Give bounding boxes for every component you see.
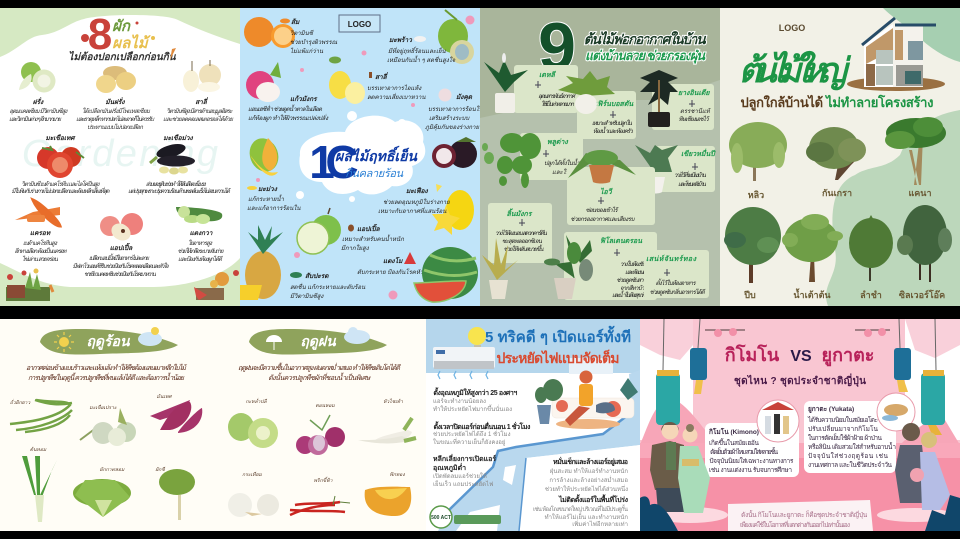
logo box: LOGO — [348, 20, 371, 29]
text: watermelon: แตงโม — [383, 256, 403, 265]
icon: lantern left small — [690, 319, 707, 394]
text: watermelon — [357, 252, 430, 276]
labels row 2: วิตามินซี เบต้าแคโรทีน และไลโคปีนสูง — [21, 180, 100, 188]
tree: kanthara — [806, 127, 866, 180]
stage floor — [640, 458, 960, 531]
text: tip 3: เปิดพัดลมแอร์ช่วยให้ — [433, 472, 487, 480]
callout: summary — [728, 500, 873, 531]
card: snake plant: ลิ้นมังกร — [506, 208, 533, 218]
labels row 2: มีใบพิษกับร่างกายไม่ปอกเปลือกและต้องหลีกเลี่ยงที่สุด — [12, 186, 111, 195]
labels row 1: และวิตามินต่าง ๆ อีกมากมาย — [9, 115, 61, 123]
card: fern: ห้องน้ำและห้องครัว — [593, 126, 633, 135]
text: dragon fruit — [248, 95, 329, 122]
icon: guava — [19, 62, 56, 92]
panel: air conditioner tips — [426, 319, 640, 531]
labels row 1: มันฝรั่ง — [105, 97, 125, 106]
icon: orange — [244, 17, 295, 48]
card: kimono: เกิดขึ้นในสมัยเฮอัน — [709, 438, 760, 447]
text: starfruit: เหมาะกับอากาศที่แสนร้อน — [378, 206, 447, 215]
icon: watering can right — [194, 270, 239, 300]
title — [538, 9, 707, 85]
text: tip 4: หมั่นเช็กและล้างแอร์อยู่เสมอ — [553, 456, 628, 467]
text: mangosteen note — [425, 88, 484, 131]
illustration: yukata couple — [877, 423, 953, 522]
text: tip 2: ในขณะที่ความเย็นก็ยังคงอยู่ — [433, 437, 505, 446]
icon: rubber plant — [640, 70, 678, 127]
text: tip 5: ทำให้แอร์ไม่เย็น และทำงานหนัก — [545, 512, 628, 521]
card: philodendron: และน้ำในห้องสุขาภิบาล — [612, 290, 652, 299]
icon: kimono circle — [757, 400, 799, 442]
text: dragon fruit: แอนเฮชีฟ่ำ ช่วยดูดน้ำตาลในเลือด — [248, 104, 323, 113]
card: ivy — [567, 167, 655, 225]
title: กิโมโน — [725, 344, 780, 365]
text: coconut — [387, 36, 456, 64]
text: rainy intro — [238, 362, 401, 382]
icon: tomato — [37, 146, 84, 178]
callout: summary: เพียงแค่ใช้ในโอกาสที่แตกต่างกันออกไปเท่านั้นเอง — [740, 520, 850, 529]
cloud title: ผลไม้ฤทธิ์เย็น — [335, 145, 418, 164]
card: yukata: ในการตัดเย็บใช้ผ้าฝ้าย ผ้าป่าน — [808, 433, 883, 442]
panel: big trees — [720, 8, 960, 306]
card: peace lily: เดหลี — [539, 70, 557, 79]
labels row 3: อีกทางเลือก ต้องเป็นแครอท — [14, 247, 68, 255]
title: 5 ทริคดี ๆ เปิดแอร์ทั้งที — [485, 325, 631, 346]
text: summer intro: การปลูกพืชในฤดูนี้ ควรปลูกพืชที่ทนแล้งได้ดี และต้องการน้ำน้อย — [28, 372, 185, 382]
card: snake plant — [488, 203, 552, 263]
icon: chili: พริกขี้ฟ้า — [314, 476, 333, 484]
text: tip 2 — [433, 420, 531, 446]
text: tip 5: เพิ่มค่าไฟอีกหลายเท่า — [572, 520, 628, 528]
panel: 10 summer fruits — [240, 8, 484, 306]
title: ประหยัดไฟแบบจัดเต็ม — [496, 349, 620, 366]
text: mangosteen note: บรรเทาอาการร้อนใน — [428, 105, 484, 113]
labels row 1 — [9, 97, 233, 131]
labels row 3: มีฟลาโวนอยด์ซิริน ช่วยป้องกันโรคหลอดเลือดและหัวใจ — [73, 262, 169, 270]
card: peace lily: อุดมสารพันธ์อากาศ — [538, 92, 576, 100]
card: kimono: กิโมโน (Kimono) — [709, 427, 759, 436]
text: pineapple: สดชื่น แก้กระหายและดับร้อน — [290, 282, 366, 291]
card: kimono: เช่น งานแต่งงาน รับจบการศึกษา — [709, 466, 792, 474]
labels row 3: ไข่เล่าน สวยจร่อน — [22, 255, 59, 263]
labels row 1: สาลี่ — [195, 97, 209, 106]
labels row 3: เบต้าแคโรทีนสูง — [23, 239, 58, 247]
card: philodendron: จากสีทาบ้าน — [620, 284, 649, 292]
text: pineapple: มีวิตามินซีสูง — [290, 292, 324, 300]
card: golden pothos: ช่วยดูดซับกลิ่นอาหารได้ดี — [650, 287, 706, 296]
tree: lamcha — [849, 215, 893, 281]
card: rubber plant — [652, 84, 714, 130]
text: orange: ส้ม — [291, 18, 300, 26]
panel: kimono vs yukata — [640, 319, 960, 531]
text: pear — [367, 72, 426, 101]
icon: long bean: ถั่วฝักยาว — [10, 398, 31, 406]
title: ยูกาตะ — [822, 345, 874, 367]
text: starfruit: มะเฟือง — [406, 187, 429, 195]
labels row 2: มะเขือม่วง — [163, 134, 194, 142]
labels row 3: แตงกวา — [190, 230, 213, 237]
text: summer intro: อากาศค่อนข้างแบบร้าวและแห้งแล้ง ทำให้พืชต้องแลนเมาหลีกใบไม้ — [26, 363, 188, 372]
text: tip 4 — [545, 456, 628, 493]
icon: cabbage — [228, 397, 278, 448]
logo: 500 act — [430, 506, 501, 528]
logo: 500 act: 500 ACT — [431, 515, 451, 521]
card: yukata: ได้รับความนิยมในสมัยเอโดะ — [807, 416, 878, 424]
text: pineapple — [290, 272, 366, 300]
text: tip 1: แอร์จะทำงานน้อยลง — [433, 397, 486, 405]
text: tip 1: ทำให้ประหยัดไฟมากขึ้นนั่นเอง — [433, 403, 512, 413]
card: rubber plant: ดรรชานีแท้ — [680, 107, 712, 115]
icon: coriander: ผักชี — [155, 466, 166, 473]
card: yukata: ปัจจุบันใส่ช่วงฤดูร้อน เช่น — [808, 452, 889, 460]
title — [725, 344, 874, 387]
text: tip 4: ฝุ่นสะสม ทำให้แอร์ทำงานหนัก — [550, 467, 628, 475]
card: peace lily — [514, 65, 578, 113]
icon: watermelon — [414, 247, 478, 302]
labels row 1: และช่วยลดคอเลสเตอรอลได้ด้วย — [163, 115, 233, 123]
text: tip 3: หลีกเลี่ยงการเปิดแอร์ — [433, 453, 496, 463]
banner: summer — [40, 327, 178, 355]
icon: lettuce — [73, 467, 131, 517]
card: chinese evergreen: และโซนหลังบ้าน — [678, 180, 707, 188]
icon: scallion: ต้นหอม — [30, 446, 47, 453]
label: khae na: แคนา — [908, 188, 932, 198]
icon: white radish — [358, 398, 416, 443]
labels row 1: อุดมแคลเซียม มีวิตามินซีสูง — [9, 107, 68, 115]
icon: carrot — [15, 200, 60, 226]
labels row 3: แอปเปิ้ล — [110, 242, 133, 252]
title: ผลไม้ — [112, 34, 152, 52]
logo box — [339, 15, 380, 32]
card: golden pothos: ตั้งไว้ในห้องอาหาร — [656, 278, 696, 287]
card: chinese evergreen — [655, 146, 716, 192]
text: pear: บรรเทาอาการไอแห้ง — [367, 84, 422, 92]
card: fern: เหมาะสำหรับปลูกใน — [592, 119, 633, 127]
text: orange: ช่วยบำรุงผิวพรรณ — [290, 39, 338, 46]
logo: LOGO — [779, 23, 805, 33]
label: lamcha: ลำชำ — [860, 290, 882, 300]
icon: mango — [245, 134, 283, 176]
icon: eggplant — [150, 141, 195, 174]
card: philodendron — [564, 232, 657, 300]
text: pineapple: สับปะรด — [305, 272, 329, 280]
labels row 1: ฝรั่ง — [33, 97, 44, 106]
banner: rainy: ฤดูฝน — [300, 333, 337, 350]
text: orange: ไม่แพ้แก่ว่าน — [290, 47, 324, 55]
labels row 3: และป้องกันท้องผูกได้ดี — [178, 255, 223, 263]
text: starfruit: ช่วยลดอุณหภูมิในร่างกาย — [383, 198, 450, 206]
text: rainy intro: ดังนั้นควรปลูกพืชผักที่ชอบน้ำเป็นพิเศษ — [268, 372, 371, 382]
text: apple: มีกากใยสูง — [341, 244, 370, 252]
icon: pineapple — [240, 225, 283, 300]
tree: khae na — [885, 117, 946, 185]
text: tip 4: ช่วยทำให้ประหยัดไฟได้ส่วนหนึ่ง — [545, 485, 628, 493]
icon: ivy pot — [568, 150, 636, 184]
cloud title — [296, 111, 425, 202]
icon: light bulb — [468, 327, 486, 351]
icon: starfruit — [432, 184, 474, 235]
card: snake plant: ช่วยให้หลับสบายขึ้น — [503, 244, 544, 253]
text: tip 4: การล้างและล้างอย่างสม่ำเสมอ — [549, 476, 628, 484]
callout: summary: ดังนั้น กิโมโนและยูกาตะ ก็คือชุดประจำชาติญี่ปุ่น — [741, 510, 868, 519]
icon: thai eggplant: มะเขือเปราะ — [89, 404, 117, 411]
decorative dots — [256, 16, 474, 300]
text: apple — [341, 223, 404, 252]
text: tip 5: เช่น ห้องโถงขนาดใหญ่ บริเวณที่ไม่มีประตูกั้น — [533, 503, 628, 513]
icon: green apple — [297, 208, 341, 254]
icon: lantern right large — [921, 319, 945, 435]
card: yukata: ปรับเปลี่ยนมาจากกิโมโน — [808, 424, 879, 433]
card: kimono: ปัจจุบันนิยมใส่เฉพาะงานทางการ — [709, 457, 794, 465]
card: pothos: พลูด่าง — [547, 138, 568, 146]
banner: summer: ฤดูร้อน — [86, 333, 131, 350]
card: rubber plant: ยางอินเดีย — [678, 88, 710, 97]
icon: peace lily plant — [484, 53, 528, 113]
card: yukata: ยูกาตะ (Yukata) — [808, 406, 854, 414]
text: orange — [290, 18, 338, 55]
title — [68, 10, 177, 63]
labels row 3 — [14, 230, 224, 278]
labels row 1: ประทานแบบไม่ปอกเปลือก — [87, 123, 143, 131]
icon: lantern right small — [894, 319, 911, 392]
card: snake plant: วางไว้ห้องนอน สดวกคาร์ดีน — [495, 229, 548, 237]
cloud title: C — [325, 136, 359, 188]
text: mangosteen note: เสริมสร้างระบบ — [429, 114, 470, 122]
text: orange: วิตามินซี — [290, 29, 314, 37]
cloud title: กินคลายร้อน — [345, 167, 404, 180]
icon: pear — [183, 60, 221, 92]
illustration: kimono couple — [650, 422, 728, 523]
icon: lettuce: ผักกาดหอม — [100, 467, 125, 473]
text: tip 1: ตั้งอุณหภูมิให้สูงกว่า 25 องศาฯ — [433, 386, 517, 398]
icon: pothos — [482, 133, 541, 188]
labels row 3: เปลือกแอปเปิ้ลมีใยอาหารไม่ละลาย — [89, 253, 149, 262]
text: tip 5 — [533, 493, 629, 528]
card: pothos — [520, 133, 583, 180]
icon: shallot — [296, 403, 345, 455]
icon: shallot: ตอนหอม — [315, 403, 335, 409]
label: calabash: น้ำเต้าต้น — [793, 288, 831, 300]
label: willow: หลิว — [748, 190, 764, 200]
card: kimono: ตัดเย็บด้วยผ้าไหม สวมใส่หลายชั้น — [710, 447, 779, 456]
icon: apple — [100, 213, 143, 244]
label: silver oak: ซิลเวอร์โอ๊ค — [899, 289, 945, 300]
text: apple: แอปเปิ้ล — [357, 223, 381, 233]
text: coconut: เหมือนกันน้ำ ๆ สดชื่นสูงใจ — [387, 55, 456, 64]
text: dragon fruit: แก้ท้องผูก ทำให้ผิวพรรณเปล่งปลั่ง — [248, 113, 329, 122]
text: apple: เหมาะสำหรับคนน้ำหนัก — [342, 234, 404, 243]
text: coconut: มะพร้าว — [389, 36, 413, 44]
card: golden pothos: เสน่ห์จันทร์ทอง — [646, 254, 697, 263]
title: ต้นไม้ฟอกอากาศในบ้าน — [584, 31, 707, 47]
tree: peep — [724, 207, 781, 283]
text: mango — [247, 185, 301, 212]
text: tip 3: อุณหภูมิต่ำ — [433, 462, 466, 473]
icon: garlic: กระเทียม — [242, 471, 263, 478]
icon: garlic — [228, 471, 279, 517]
icon: fern — [558, 71, 615, 114]
decoration: cherry branches — [705, 328, 890, 337]
text: starfruit — [378, 187, 450, 215]
icon: long bean — [10, 398, 72, 432]
icon: sweet potato — [150, 394, 202, 433]
icon: pumpkin: ฟักทอง — [389, 472, 405, 478]
text: tip 3 — [433, 453, 496, 488]
icon: chili — [290, 476, 350, 515]
panel: 9 air purifying plants — [480, 8, 720, 306]
card: golden pothos — [644, 250, 709, 298]
text: mangosteen note: ภูมิคุ้มกันของร่างกาย — [425, 123, 480, 131]
labels row 2 — [12, 134, 232, 195]
text: mango: และแก้อาการร้อนใน — [247, 204, 301, 212]
tree: silver oak — [897, 205, 952, 282]
text: coconut: มีที่อยู่ฤทธิ์ร้อนและเย็น — [388, 46, 447, 55]
cloud title: 1 — [309, 136, 335, 188]
text: rainy intro: ฤดูฝนจะมีความชื้นในอากาศสูง ฝนตกสม่ำเสมอ ทำให้พืชเติบโตได้ดี — [238, 362, 401, 372]
text: pear: สาลี่ — [375, 72, 389, 81]
card: philodendron: ช่วยดูดซับสารพิษ — [616, 277, 653, 284]
icon: coriander — [155, 466, 195, 520]
icon: snake plant — [482, 238, 518, 299]
card: fern — [577, 91, 636, 139]
card: chinese evergreen: เขียวหมื่นปี — [681, 148, 716, 158]
labels row 3: ชาเขียว แคตเทชิน ช่วยป้องกันโรคเบาหวาน — [84, 270, 157, 278]
icon: air conditioner — [433, 347, 495, 379]
icon: cabbage: กะหล่ำปลี — [245, 397, 268, 405]
icon: mangosteen — [432, 137, 477, 168]
labels row 2: ส่วนของรูติน ช่วยทำให้เส้นเลือดแข็งแรง — [146, 180, 207, 188]
labels row 2: มะเขือเทศ — [46, 134, 76, 142]
text: mango: มะม่วง — [258, 185, 278, 193]
card: snake plant: ซะสุดพลออกซิเจน — [502, 238, 543, 245]
text: summer intro — [26, 363, 188, 382]
card: ivy: ช่วยกรองอากาศและเสียงรบ — [570, 215, 636, 223]
icon: pear — [329, 56, 365, 104]
label: peep: ปีบ — [743, 290, 756, 300]
card: ivy: ซ่อนของเข้าไร้ — [586, 206, 620, 214]
panel: 8 vegetables and fruits — [0, 8, 240, 306]
icon: sweet potato: มันเทศ — [157, 394, 172, 400]
icon: dragon fruit — [246, 62, 281, 102]
card: philodendron: วางในห้องรับแขก — [620, 260, 654, 268]
text: tip 5: ไม่ติดตั้งแอร์ในพื้นที่โปร่ง — [558, 493, 629, 504]
text: mangosteen note: มังคุด — [456, 93, 473, 101]
icon: white radish: หัวไชเท้า — [383, 398, 403, 405]
text: pear: ลดความเสี่ยงเบาหวาน — [367, 92, 426, 101]
title: VS — [790, 348, 812, 365]
title: ไม่ต้องปอกเปลือกก่อนกิน — [68, 50, 177, 63]
card: philodendron: ฟิโลเดนดรอน — [600, 236, 643, 245]
card: chinese evergreen: วางไว้ที่ระเบียงบ้าน — [674, 170, 707, 179]
labels row 1: ใต้เปลือกมันฝรั่งมีโพแทสเซียม — [82, 106, 151, 115]
labels row 2: แต่ปรุงสุกเพราะปรุงความร้อน ต้านเซลล์มะเร็งไม่สงบหวานได้ — [128, 187, 232, 195]
labels row 1: วิตามินซีสูง มีสารต้านอนุมูลอิสระ — [166, 107, 233, 115]
label: kanthara: กันเกรา — [822, 188, 852, 198]
card: yukata — [804, 401, 896, 473]
icon: lantern left large — [656, 319, 680, 432]
text: mango: แก้กระหายน้ำ — [248, 194, 285, 203]
title: ผัก — [112, 18, 131, 35]
icon: yukata circle — [877, 393, 915, 431]
icon: coconut — [438, 10, 474, 64]
card: pothos: ปลูกได้ทั้งในน้ำ — [544, 158, 581, 167]
labels row 3: ช่วยให้เกลือระบายจับถ่าย — [178, 247, 224, 255]
card: philodendron: และห้องนอน — [625, 268, 650, 276]
title: ชุดไหน ? ชุดประจำชาติญี่ปุ่น — [734, 373, 866, 387]
illustration: woman on sofa — [535, 370, 638, 429]
text: watermelon: ดับกระหาย ป้องกันโรคหัวใจ — [357, 268, 430, 276]
title: ปลูกใกล้บ้านได้ ไม่ทำลายโครงสร้าง — [740, 94, 934, 111]
text: tip 3: เย็นเร็ว แถมประหยัดไฟ — [433, 479, 493, 488]
text: tip 2: ช่วยประหยัดไฟได้ถึง 1 ชั่วโมง — [433, 430, 511, 438]
text: tip 1 — [433, 386, 517, 413]
card: rubber plant: พิษเชียงเอชไว้ — [679, 115, 711, 123]
title: 9 — [538, 9, 576, 85]
title: ต้นไม้ใหญ่ — [739, 50, 852, 91]
card: peace lily: ใช้เป็นท่าหลายมาก — [541, 100, 574, 108]
card: yukata: งานเทศกาล และในชีวิตประจำวัน — [808, 461, 893, 469]
card: kimono — [705, 423, 799, 477]
card: ivy: ไอวี — [600, 187, 614, 196]
card: yukata: หรือลินิน เดิมสวมใส่สำหรับอาบน้ำ — [808, 442, 896, 451]
tree: calabash — [782, 214, 843, 282]
title: 8 — [88, 10, 112, 59]
icon: scallion — [22, 446, 57, 522]
icon: pumpkin — [365, 472, 411, 516]
icon: thai eggplant — [80, 404, 136, 446]
icon: chinese evergreen — [635, 145, 678, 194]
icon: philodendron — [544, 235, 593, 299]
icon: cucumber — [176, 206, 222, 224]
icon: potato — [96, 66, 136, 93]
title: แต่งบ้านสวย ช่วยกรองฝุ่น — [585, 48, 706, 64]
title — [485, 325, 631, 366]
text: dragon fruit: แก้วมังกร — [290, 95, 318, 103]
text: tip 2: ตั้งเวลาปิดแอร์ก่อนตื่นนอน 1 ชั่วโมง — [433, 420, 531, 431]
icon: house — [847, 18, 945, 91]
labels row 3: ใยอาหารสูง — [188, 239, 213, 247]
labels row 1: และธาตุเหล็ก หากปอกไม่สะอาดก็ไม่ควรรับ — [76, 115, 155, 123]
icon: garden bed left — [6, 268, 53, 301]
decoration: blue leaves — [640, 495, 960, 531]
watermark: Gardening — [22, 133, 218, 175]
card: pothos: และในดิน — [552, 168, 579, 176]
card: fern: เฟิร์นบอสตัน — [595, 99, 634, 108]
banner: rainy — [249, 327, 387, 355]
title — [739, 50, 934, 111]
tree: willow — [729, 122, 787, 181]
labels row 3: แครอท — [30, 230, 51, 237]
panel: seasonal vegetables — [0, 319, 426, 531]
